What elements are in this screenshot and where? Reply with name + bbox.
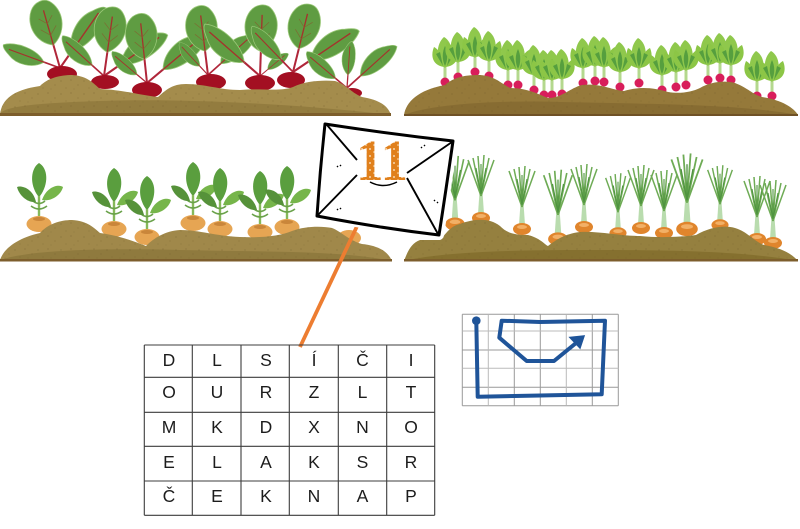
grid letters: A — [260, 452, 272, 472]
turnip plants — [17, 162, 361, 246]
grid lines — [144, 345, 435, 515]
grid letters: A — [357, 486, 369, 506]
grid letters: Z — [309, 382, 320, 402]
grid letters: K — [260, 486, 272, 506]
grid letters: U — [211, 382, 223, 402]
route arrowhead — [570, 336, 584, 348]
grid letters: K — [211, 417, 223, 437]
route line — [476, 321, 605, 397]
route diagram on squared grid — [462, 314, 618, 406]
carrot plants — [441, 153, 786, 249]
grid letters: T — [406, 382, 417, 402]
letter grid — [144, 345, 435, 515]
envelope body — [317, 124, 453, 235]
grid letters: L — [358, 382, 368, 402]
grid letters: R — [405, 452, 417, 472]
grid letters: K — [308, 452, 320, 472]
grid letters: D — [260, 417, 272, 437]
soil — [404, 220, 798, 261]
panel: beets row — [0, 0, 401, 116]
grid letters: D — [163, 350, 175, 370]
grid letters: R — [260, 382, 272, 402]
soil — [0, 220, 392, 261]
grid letters: E — [163, 452, 175, 472]
grid letters: S — [260, 350, 272, 370]
panel: turnips row — [0, 162, 392, 262]
grid letters: P — [405, 486, 417, 506]
grid letters: Č — [163, 485, 175, 506]
grid letters: E — [211, 486, 223, 506]
arrow: orange connector line — [300, 222, 359, 347]
radish plants — [432, 27, 785, 100]
grid letters: I — [409, 350, 413, 370]
panel: carrots row — [404, 153, 798, 262]
beet roots — [47, 66, 362, 98]
soil — [404, 75, 798, 115]
grid letters: Č — [356, 349, 369, 370]
grid letters: S — [357, 452, 368, 472]
grid letters: L — [212, 350, 222, 370]
grid letters: N — [356, 417, 369, 437]
grid letters: L — [212, 452, 222, 472]
beet plants — [0, 0, 401, 94]
icon: envelope with number — [317, 124, 453, 235]
grid letters: O — [162, 382, 176, 402]
grid letters: M — [162, 417, 176, 437]
grid letters: X — [308, 417, 320, 437]
route start dot — [472, 316, 481, 325]
squared grid — [462, 314, 618, 406]
soil — [0, 75, 391, 115]
grid letters — [162, 349, 418, 506]
grid letters: O — [404, 417, 418, 437]
grid letters: N — [308, 486, 320, 506]
grid letters: Í — [312, 350, 317, 370]
panel: radishes row — [404, 27, 798, 116]
number 11: 11 — [356, 128, 408, 193]
